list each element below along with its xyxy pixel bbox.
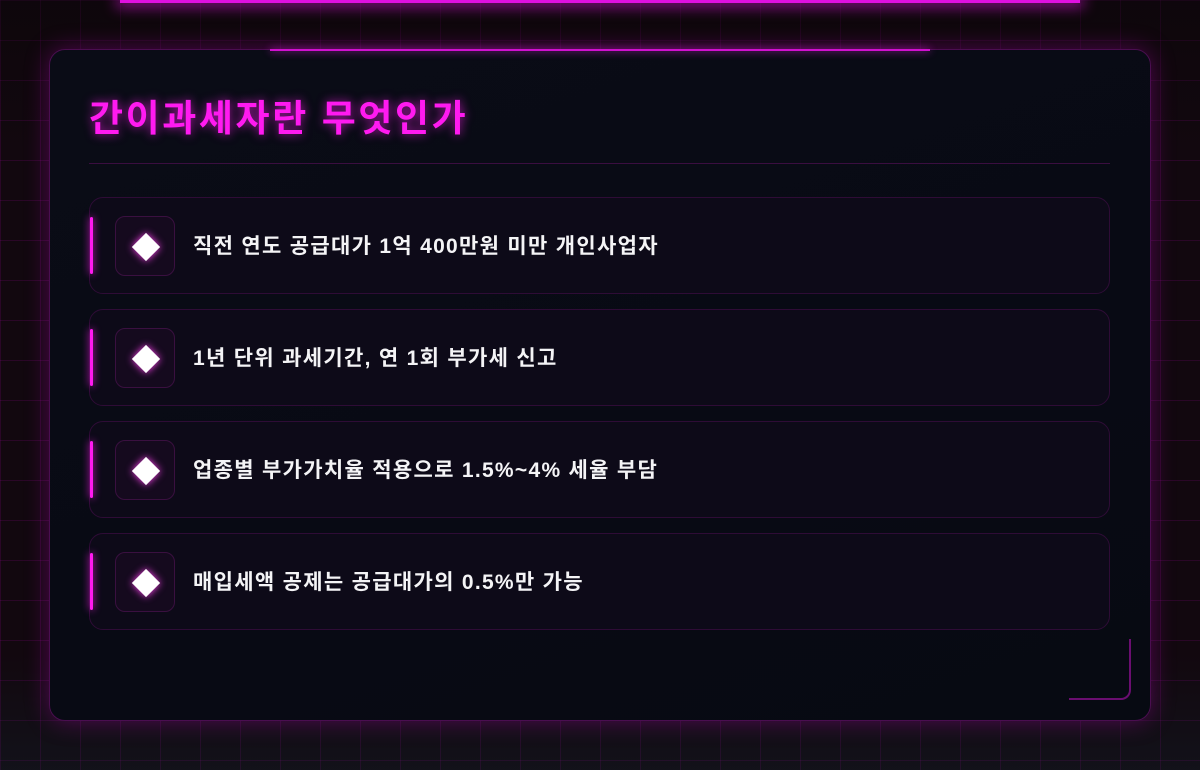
icon: diamond: [115, 328, 175, 388]
item 2: [89, 309, 1110, 406]
text 2: 1년 단위 과세기간, 연 1회 부가세 신고: [193, 347, 558, 370]
text 1: 직전 연도 공급대가 1억 400만원 미만 개인사업자: [193, 235, 659, 258]
title: 간이과세자란 무엇인가: [89, 98, 468, 139]
icon: diamond: [115, 552, 175, 612]
text 4: 매입세액 공제는 공급대가의 0.5%만 가능: [193, 571, 584, 594]
item 1: [89, 197, 1110, 294]
corner bracket: [1069, 639, 1131, 700]
text 3: 업종별 부가가치율 적용으로 1.5%~4% 세율 부담: [193, 459, 658, 482]
item 4: [89, 533, 1110, 630]
icon: diamond: [115, 440, 175, 500]
item 3: [89, 421, 1110, 518]
icon: diamond: [115, 216, 175, 276]
